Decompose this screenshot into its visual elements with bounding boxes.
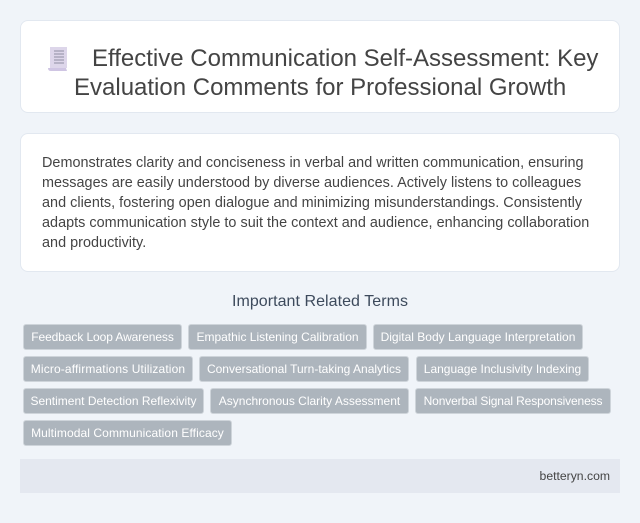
tag xyxy=(199,356,409,382)
summary text: messages are easily understood by diverse audiences. Actively listens to colleagues xyxy=(42,175,581,191)
title: Evaluation Comments for Professional Growth xyxy=(74,74,566,101)
tag xyxy=(210,388,409,414)
footer xyxy=(20,459,620,493)
tag: Asynchronous Clarity Assessment xyxy=(219,394,400,408)
icon: document scroll xyxy=(48,47,67,71)
title: Effective Communication Self-Assessment: Key xyxy=(92,45,598,72)
summary text xyxy=(42,155,589,251)
summary text: and clients, fostering open dialogue and minimizing misunderstandings. Consistently xyxy=(42,195,582,211)
summary card xyxy=(20,133,620,272)
summary text: adapts communication style to suit the context and audience, enhancing collaboration xyxy=(42,215,589,231)
tag xyxy=(188,324,367,350)
tag: Digital Body Language Interpretation xyxy=(381,330,575,344)
footer site name: betteryn.com xyxy=(540,469,610,483)
tag xyxy=(23,420,232,446)
tag: Multimodal Communication Efficacy xyxy=(31,426,224,440)
related terms tags xyxy=(23,324,611,446)
tag xyxy=(415,388,611,414)
tag: Micro-affirmations Utilization xyxy=(31,362,185,376)
tag: Sentiment Detection Reflexivity xyxy=(30,394,197,408)
summary text: Demonstrates clarity and conciseness in verbal and written communication, ensuring xyxy=(42,155,584,171)
related terms heading: Important Related Terms xyxy=(232,293,408,310)
tag: Nonverbal Signal Responsiveness xyxy=(424,394,602,408)
tag xyxy=(23,324,182,350)
tag: Empathic Listening Calibration xyxy=(196,330,359,344)
tag xyxy=(373,324,583,350)
tag xyxy=(23,356,193,382)
tag: Language Inclusivity Indexing xyxy=(424,362,581,376)
tag: Conversational Turn-taking Analytics xyxy=(207,362,401,376)
summary text: and productivity. xyxy=(42,235,146,251)
header card xyxy=(20,20,620,113)
title xyxy=(74,45,598,101)
tag xyxy=(416,356,589,382)
tag xyxy=(23,388,204,414)
tag: Feedback Loop Awareness xyxy=(31,330,174,344)
